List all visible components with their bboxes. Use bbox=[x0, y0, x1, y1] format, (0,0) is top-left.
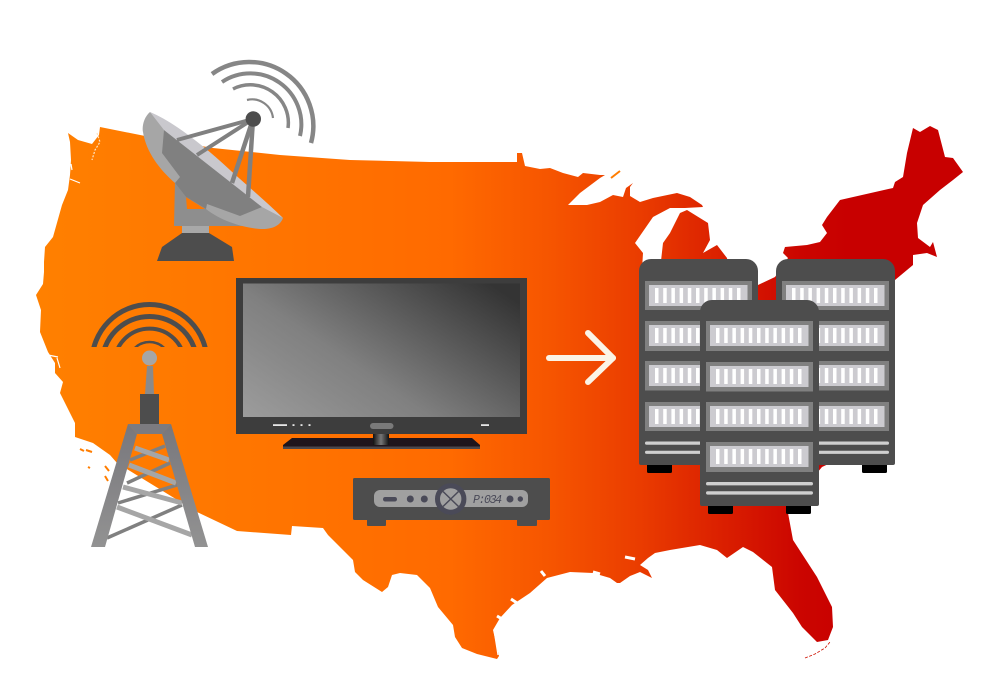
dish bowl bbox=[143, 112, 283, 229]
dish arms bbox=[177, 119, 253, 197]
tv frame bbox=[236, 278, 527, 434]
dish stand bbox=[174, 180, 243, 226]
tv stand neck bbox=[373, 433, 389, 445]
box channel readout: P:034 bbox=[473, 494, 502, 507]
dish receiver bbox=[246, 111, 261, 127]
tower dark cross beams bbox=[107, 446, 182, 538]
tv controls bbox=[273, 424, 489, 426]
dish neck bbox=[182, 226, 209, 233]
icon: broadcast tower bbox=[91, 304, 208, 547]
box body bbox=[353, 478, 550, 520]
icon: server rack left bbox=[639, 259, 758, 473]
icon: satellite dish bbox=[143, 62, 313, 261]
tower antenna bbox=[145, 366, 154, 394]
icon: server rack right bbox=[776, 259, 895, 473]
box dial bbox=[438, 486, 464, 512]
icon: television bbox=[236, 278, 527, 449]
map details: coastal inlets and islands bbox=[48, 133, 830, 658]
tv stand base bbox=[283, 438, 480, 447]
box feet bbox=[367, 519, 386, 526]
map: continental United States with orange to red gradient bbox=[36, 126, 963, 659]
dish inner panel bbox=[162, 130, 262, 216]
tv screen bbox=[243, 284, 520, 417]
tower top box bbox=[140, 394, 159, 424]
box front panel bbox=[374, 490, 528, 507]
icon: server rack front bbox=[700, 300, 819, 514]
dish base bbox=[157, 233, 234, 261]
tower light cross beams bbox=[117, 448, 192, 535]
tower signal arcs bbox=[91, 302, 208, 347]
tower legs bbox=[91, 424, 137, 547]
arrow bbox=[549, 333, 613, 382]
signal waves bbox=[212, 62, 313, 143]
icon: set-top box bbox=[353, 478, 550, 526]
dish rim bbox=[150, 112, 283, 218]
